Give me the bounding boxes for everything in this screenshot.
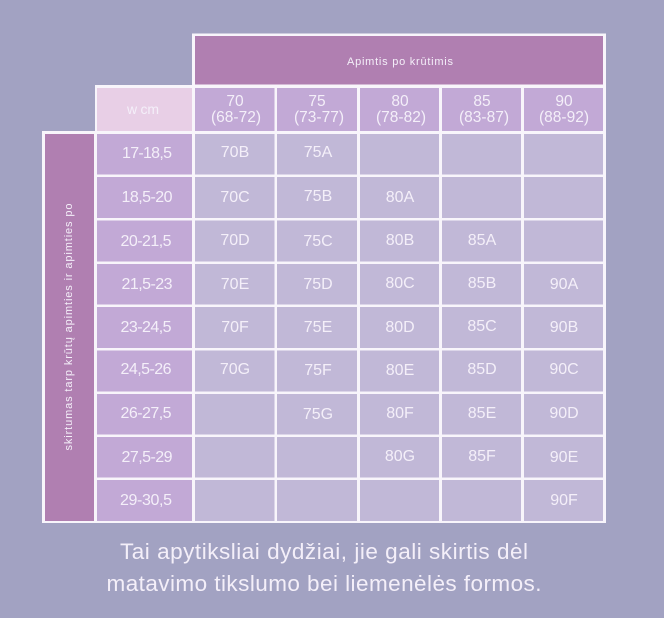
size cells background xyxy=(195,134,603,521)
row headers: 24,5-26 xyxy=(120,361,172,378)
size labels: 80B xyxy=(386,232,414,249)
column headers: (83-87) xyxy=(459,109,509,126)
size labels: 90B xyxy=(550,319,578,336)
column headers: (68-72) xyxy=(211,109,261,126)
size labels: 90E xyxy=(550,449,578,466)
row headers: 17-18,5 xyxy=(122,145,172,162)
size labels: 90D xyxy=(549,405,579,422)
size labels: 75B xyxy=(304,188,332,205)
size labels: 90F xyxy=(550,492,578,509)
size labels: 85A xyxy=(468,232,497,249)
size labels xyxy=(220,144,579,509)
panel: side header: skirtumas tarp krūtų apimties ir apimties po xyxy=(63,204,75,450)
size labels: 85B xyxy=(468,275,496,292)
table frame xyxy=(42,34,606,523)
size labels: 75G xyxy=(303,406,333,423)
column headers: 90 xyxy=(555,93,573,110)
column headers xyxy=(195,88,603,131)
size labels: 85D xyxy=(467,361,497,378)
row headers: 29-30,5 xyxy=(120,492,172,509)
corner cell: w cm xyxy=(97,88,192,131)
footnote: matavimo tikslumo bei liemenėlės formos. xyxy=(106,571,542,596)
size labels: 80A xyxy=(386,189,415,206)
footnote: Tai apytiksliai dydžiai, jie gali skirtis dėl xyxy=(120,539,528,564)
size labels: 75E xyxy=(304,319,332,336)
size labels: 75F xyxy=(304,362,332,379)
size labels: 70B xyxy=(221,144,249,161)
size labels: 70E xyxy=(221,276,249,293)
column headers: (88-92) xyxy=(539,109,589,126)
size labels: 85E xyxy=(468,405,496,422)
size labels: 90C xyxy=(549,361,579,378)
panel: side header xyxy=(45,134,94,521)
size labels: 80E xyxy=(386,362,414,379)
panel: top header: Apimtis po krūtimis xyxy=(347,56,454,68)
size labels: 85F xyxy=(468,448,496,465)
size labels: 75C xyxy=(303,233,333,250)
size labels: 80F xyxy=(386,405,414,422)
panel: top header xyxy=(195,36,603,84)
column headers: (73-77) xyxy=(294,109,344,126)
footnote xyxy=(106,539,542,596)
row headers: 23-24,5 xyxy=(120,319,172,336)
row headers: 21,5-23 xyxy=(122,276,173,293)
row headers: 26-27,5 xyxy=(120,405,172,422)
size labels: 80G xyxy=(385,448,415,465)
row headers: 27,5-29 xyxy=(122,449,173,466)
size labels: 80C xyxy=(385,275,415,292)
row headers: 18,5-20 xyxy=(122,189,173,206)
corner cell: w cm: w cm xyxy=(126,101,159,117)
row headers xyxy=(97,134,192,521)
size labels: 90A xyxy=(550,276,579,293)
size labels: 70D xyxy=(220,232,250,249)
size labels: 80D xyxy=(385,319,415,336)
column headers: (78-82) xyxy=(376,109,426,126)
row headers: 20-21,5 xyxy=(120,233,172,250)
size labels: 70F xyxy=(221,319,249,336)
size labels: 75D xyxy=(303,276,333,293)
column headers: 85 xyxy=(473,93,491,110)
size labels: 70C xyxy=(220,189,250,206)
column headers: 80 xyxy=(391,93,409,110)
column headers: 70 xyxy=(226,93,244,110)
column headers: 75 xyxy=(308,93,326,110)
size labels: 70G xyxy=(220,361,250,378)
size labels: 75A xyxy=(304,144,333,161)
size labels: 85C xyxy=(467,318,497,335)
